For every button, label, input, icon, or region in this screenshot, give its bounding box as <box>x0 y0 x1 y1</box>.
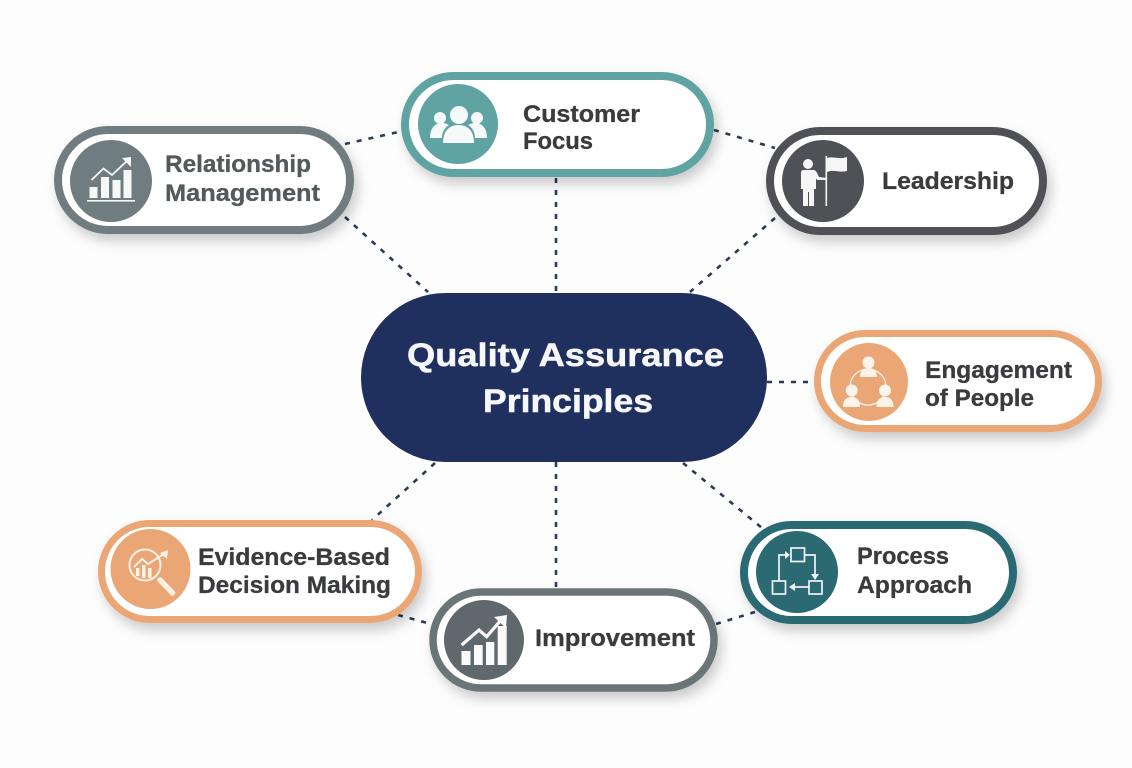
label: Engagement <box>925 357 1072 384</box>
central title <box>407 337 724 419</box>
node: Leadership <box>770 131 1043 231</box>
node: Customer Focus <box>405 76 710 173</box>
node: Improvement <box>433 592 714 688</box>
label: Customer <box>523 101 640 128</box>
icon: group of people <box>418 84 498 164</box>
central node: Quality Assurance Principles <box>361 293 767 462</box>
label: Evidence-Based <box>198 544 390 571</box>
label <box>198 544 391 599</box>
icon: magnifier over chart <box>110 529 190 609</box>
dashed connectors <box>345 130 814 624</box>
node: Relationship Management <box>58 130 350 230</box>
icon: connected people <box>830 343 908 421</box>
label: Process <box>857 543 949 570</box>
label: Approach <box>857 572 972 599</box>
label: Improvement <box>535 625 695 652</box>
label: Relationship <box>165 151 311 178</box>
label: Focus <box>523 128 593 155</box>
label: Leadership <box>882 168 1014 195</box>
label <box>523 101 640 155</box>
node: Engagement of People <box>818 334 1098 428</box>
icon: bars with growth arrow <box>444 600 524 680</box>
icon: person with flag <box>782 140 864 222</box>
central title: Principles <box>483 383 653 419</box>
label <box>925 357 1072 412</box>
icon: process flow <box>756 531 838 613</box>
node: Process Approach <box>744 525 1013 620</box>
label <box>857 543 972 599</box>
label: of People <box>925 385 1034 412</box>
label: Management <box>165 180 320 207</box>
label: Decision Making <box>198 572 391 599</box>
node: Evidence-Based Decision Making <box>102 524 418 620</box>
central title: Quality Assurance <box>407 337 724 373</box>
label <box>165 151 320 207</box>
icon: bar chart with rising arrow <box>70 140 152 222</box>
